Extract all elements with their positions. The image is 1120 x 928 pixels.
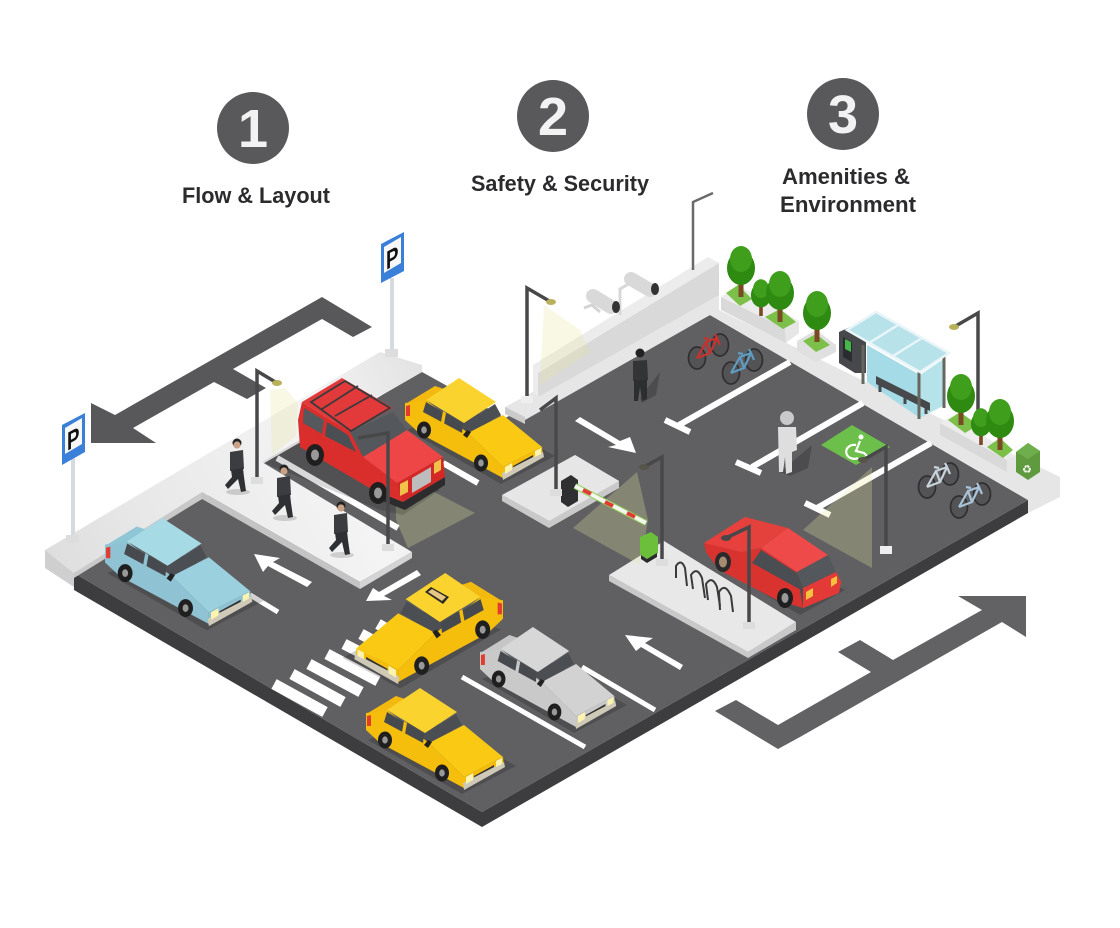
flow arrow: bottom right (715, 596, 1026, 749)
bike rack (676, 562, 733, 612)
heading: Amenities & Environment: Environment (780, 192, 917, 217)
parking sign: left: P (67, 422, 80, 458)
direction arrows on pavement (254, 417, 683, 670)
security wall (533, 257, 719, 397)
car: yellow top (405, 378, 555, 484)
step 1 (182, 92, 331, 208)
car: silver (480, 627, 627, 733)
boom barrier (561, 475, 658, 563)
trees (727, 246, 1014, 450)
street lamps (257, 193, 978, 623)
security cameras (584, 279, 659, 315)
planters (721, 285, 1016, 472)
car: taxi with roof sign (342, 573, 503, 689)
parking sign: top: P (386, 241, 399, 277)
bus shelter (847, 312, 949, 419)
parking stall lines (250, 362, 931, 747)
badge 1 (217, 92, 289, 164)
pedestrians on walkway (225, 438, 354, 558)
badge 2 (517, 80, 589, 152)
crosswalk (274, 624, 392, 712)
parking sign: top (381, 232, 404, 357)
standing figure (778, 411, 812, 476)
lamp heads and bases (251, 299, 959, 629)
step 2 (471, 80, 650, 196)
heading: Amenities & Environment: Amenities & (782, 164, 910, 189)
accessible parking bay (821, 425, 890, 465)
light cone: entrance lamps (270, 305, 872, 568)
step 3 (780, 78, 917, 217)
heading: Safety & Security: Safety & Security (471, 171, 650, 196)
car: red SUV (262, 378, 445, 515)
badge 2: 2 (538, 87, 568, 147)
security guard (633, 348, 660, 403)
flow arrow: top left (91, 297, 372, 443)
ticket kiosk (839, 327, 866, 373)
top left sidewalk (45, 352, 422, 589)
heading: Flow & Layout: Flow & Layout (182, 183, 331, 208)
wall curb and back curb (505, 295, 1060, 513)
bicycles: right corner (918, 463, 990, 518)
badge 3: 3 (828, 85, 858, 145)
bike rack island (609, 541, 796, 658)
recycling bin: ♻ (1022, 464, 1032, 476)
recycling bin (1016, 443, 1040, 480)
bicycles: near wall (688, 334, 762, 384)
car: yellow bottom (366, 688, 516, 794)
lot platform (74, 315, 1028, 827)
car: red wagon (704, 517, 845, 615)
parking sign: left (62, 413, 85, 543)
gate island (502, 455, 619, 528)
badge 1: 1 (238, 99, 268, 159)
car: light blue (105, 518, 264, 630)
